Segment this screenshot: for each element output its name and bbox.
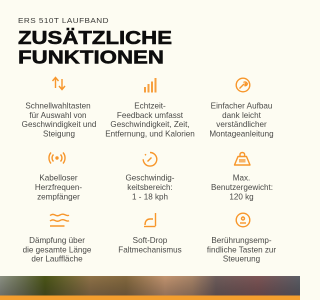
text: cushioning: der Lauffläche	[31, 254, 83, 264]
feature: easy assembly	[209, 78, 274, 138]
title: FUNKTIONEN	[18, 48, 164, 68]
icon: speedometer	[143, 152, 157, 166]
icon: waves	[50, 214, 69, 226]
text: wireless heart rate: zempfänger	[37, 192, 80, 202]
text: speed range: Geschwindig-	[125, 174, 175, 182]
icon: wrench in circle	[236, 78, 250, 92]
eyebrow heading: ERS 510T LAUFBAND	[18, 18, 109, 25]
icon: up and down arrows	[52, 78, 65, 90]
text: soft-drop folding: Soft-Drop	[133, 236, 168, 245]
title	[18, 28, 172, 68]
title: ZUSÄTZLICHE	[18, 28, 172, 48]
text: speed range: keitsbereich:	[127, 183, 173, 192]
feature: touch controls	[207, 213, 276, 264]
feature: speed range	[125, 152, 175, 202]
text: easy assembly: dank leicht	[222, 111, 262, 120]
text: realtime feedback: Feedback umfasst	[117, 111, 184, 120]
feature: speed and incline shortcuts	[22, 78, 96, 138]
text: wireless heart rate: Kabelloser	[39, 174, 78, 182]
text: realtime feedback	[105, 102, 195, 138]
text: easy assembly: Montageanleitung	[209, 130, 274, 138]
text: max user weight: Benutzergewicht:	[211, 183, 273, 192]
text: touch controls: Steuerung	[223, 254, 260, 264]
text: max user weight	[211, 174, 273, 202]
orange footer bar	[0, 296, 300, 300]
text: shortcuts: Steigung	[43, 130, 75, 138]
text: cushioning	[23, 236, 92, 264]
text: realtime feedback: Echtzeit-	[134, 102, 166, 110]
text: wireless heart rate	[35, 174, 82, 202]
icon: touch button	[236, 213, 250, 227]
text: shortcuts: Schnellwahltasten	[25, 102, 91, 110]
text: wireless heart rate: Herzfrequen-	[35, 183, 82, 192]
text: soft-drop folding: Faltmechanismus	[118, 246, 182, 254]
text: shortcuts	[22, 102, 96, 138]
text: shortcuts: Geschwindigkeit und	[22, 120, 96, 129]
text: realtime feedback: Geschwindigkeit, Zeit,	[110, 120, 190, 129]
icon: kg weight	[234, 152, 250, 165]
text: speed range: 1 - 18 kph	[132, 192, 168, 202]
text: touch controls: findliche Tasten zur	[207, 246, 276, 254]
text: realtime feedback: Entfernung, und Kalorien	[105, 130, 195, 138]
icon: folding deck	[144, 213, 156, 226]
blurred photo strip	[0, 276, 300, 296]
icon: wireless signal	[49, 152, 65, 164]
text: cushioning: Dämpfung über	[29, 236, 85, 245]
feature: wireless heart rate	[35, 152, 82, 202]
feature: realtime feedback	[105, 78, 195, 138]
text: easy assembly: Einfacher Aufbau	[211, 102, 272, 110]
text: max user weight: Max.	[233, 174, 250, 182]
text: touch controls: Berührungsemp-	[211, 236, 272, 245]
text: max user weight: 120 kg	[229, 192, 254, 202]
text: easy assembly	[209, 102, 274, 138]
feature: soft-drop folding	[118, 213, 182, 254]
text: easy assembly: verständlicher	[216, 120, 267, 129]
feature: max user weight	[211, 152, 273, 202]
text: soft-drop folding	[118, 236, 182, 254]
icon: signal bars	[144, 78, 156, 92]
feature: cushioning	[23, 214, 92, 264]
text: speed range	[125, 174, 175, 202]
text: cushioning: die gesamte Länge	[23, 246, 92, 254]
text: shortcuts: für Auswahl von	[29, 111, 87, 120]
text: touch controls	[207, 236, 276, 264]
